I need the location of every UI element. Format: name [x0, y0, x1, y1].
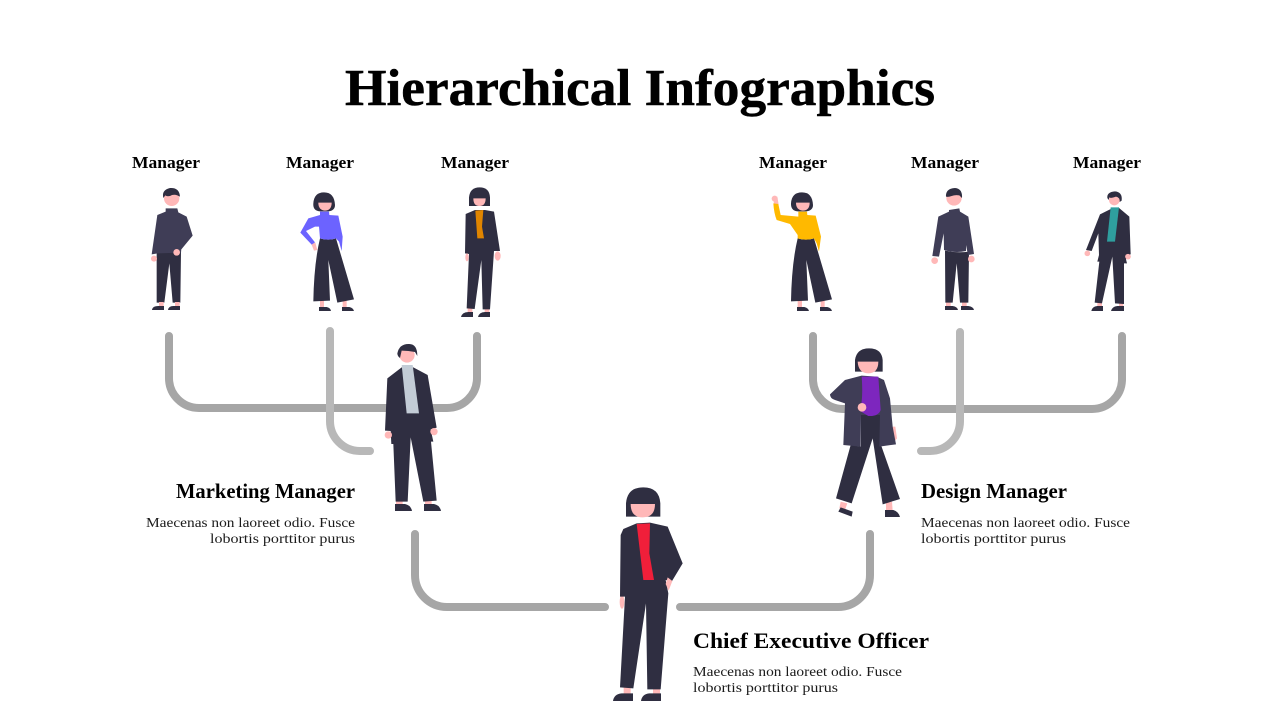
connectors: executive group	[415, 534, 870, 607]
figure: manager in dark sweater	[151, 188, 193, 310]
figure: manager in suit with teal tie	[1084, 191, 1131, 311]
text block: design manager	[921, 479, 1130, 547]
figure: manager in purple top	[300, 192, 354, 311]
text block: design manager: Design Manager	[921, 479, 1067, 503]
figure: marketing manager	[385, 344, 441, 511]
connectors: right manager group	[813, 332, 1122, 451]
connectors: left manager group	[169, 331, 477, 451]
text block: marketing manager: lobortis porttitor purus	[210, 532, 355, 547]
text block: design manager: lobortis porttitor purus	[921, 532, 1066, 547]
text block: chief executive officer	[693, 628, 929, 696]
manager label 5: Manager	[911, 153, 979, 172]
text block: marketing manager: Maecenas non laoreet odio. Fusce	[146, 516, 355, 531]
text block: design manager: Maecenas non laoreet odio. Fusce	[921, 516, 1130, 531]
manager label 6: Manager	[1073, 153, 1141, 172]
text block: chief executive officer: lobortis porttitor purus	[693, 681, 838, 696]
figure: manager in sweater, arms down	[931, 188, 975, 310]
text block: marketing manager	[146, 479, 355, 547]
text block: marketing manager: Marketing Manager	[176, 479, 355, 503]
figure: manager waving in yellow top	[772, 192, 832, 311]
figure: chief executive officer	[613, 487, 683, 701]
figure: manager in black suit with orange top	[461, 187, 501, 317]
manager label 4: Manager	[759, 153, 827, 172]
manager label 1: Manager	[132, 153, 200, 172]
title: Hierarchical Infographics	[345, 60, 935, 117]
figure: design manager	[830, 348, 900, 517]
text block: chief executive officer: Chief Executive Officer	[693, 628, 929, 653]
manager label 3: Manager	[441, 153, 509, 172]
manager label 2: Manager	[286, 153, 354, 172]
text block: chief executive officer: Maecenas non laoreet odio. Fusce	[693, 665, 902, 680]
